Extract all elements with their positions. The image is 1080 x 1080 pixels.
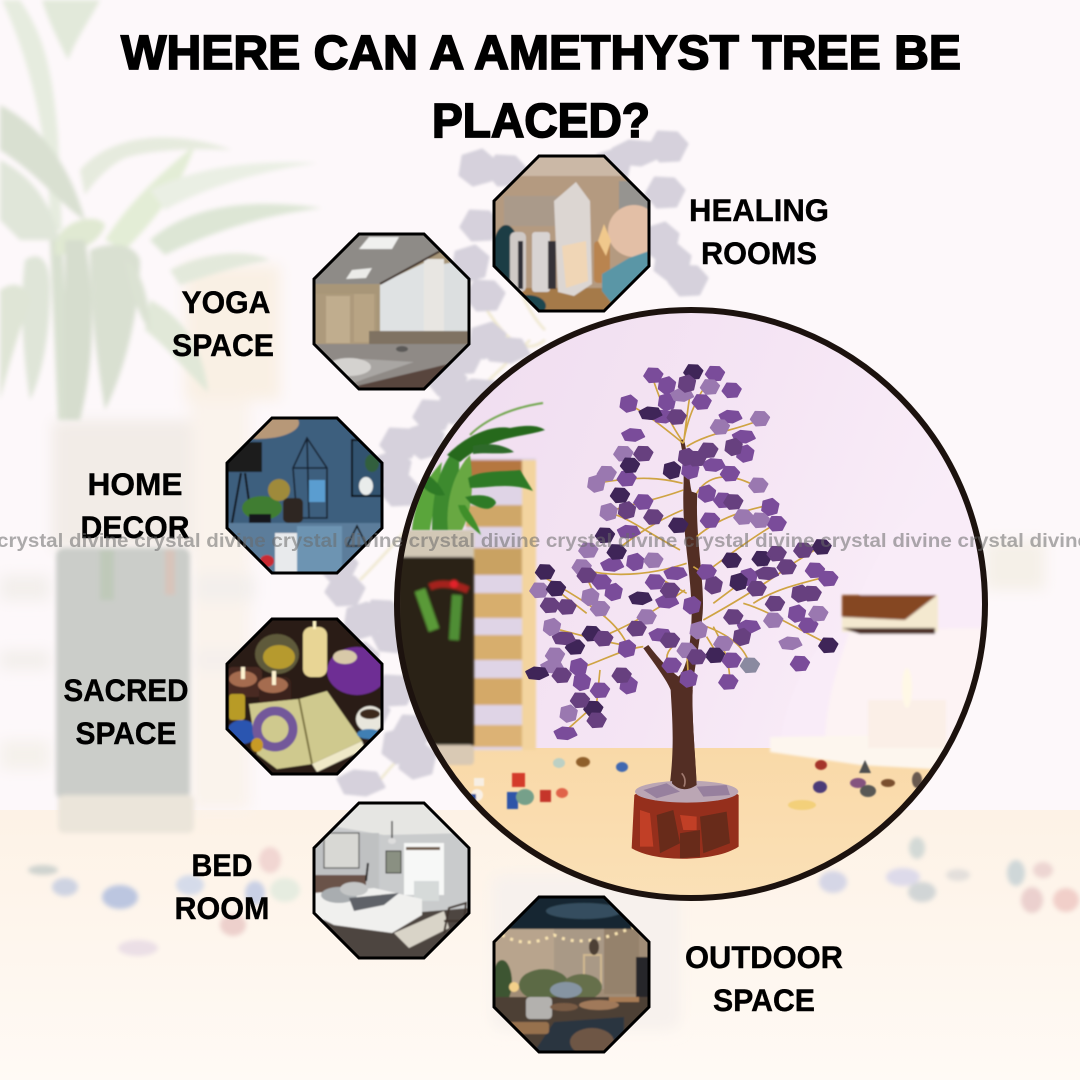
label: outdoor space: SPACE (713, 982, 815, 1018)
main circle photo with amethyst tree (390, 300, 990, 913)
label: outdoor space: OUTDOOR (685, 939, 843, 975)
label: healing rooms: HEALING (689, 192, 829, 228)
photo backdrop: wall and table (410, 313, 956, 895)
label: home decor (80, 466, 190, 545)
wooden shelf (466, 458, 536, 750)
octagon: healing rooms photo (491, 156, 660, 317)
title: PLACED? (432, 95, 650, 148)
label: bed room (174, 847, 270, 926)
label: sacred space: SPACE (76, 715, 176, 751)
label: yoga space (172, 284, 274, 363)
octagon: outdoor space photo (492, 897, 649, 1056)
title (121, 27, 961, 148)
label: sacred space (64, 672, 188, 751)
label: bed room: ROOM (174, 890, 270, 926)
label: yoga space: SPACE (172, 327, 274, 363)
circle outline (397, 310, 985, 898)
label: bed room: BED (192, 847, 252, 883)
amethyst chips (554, 367, 838, 739)
octagon: home decor photo (215, 407, 382, 573)
background bamboo plant (0, 0, 322, 420)
ghost amethyst tree behind the circle (319, 132, 707, 795)
label: outdoor space (685, 939, 843, 1018)
label: healing rooms: ROOMS (701, 235, 817, 271)
background vase (56, 548, 194, 833)
watermark: crystal divine crystal divine crystal divine crystal divine crystal divine crystal divine crystal divine crystal divine (0, 530, 1080, 552)
octagon: sacred space photo (227, 619, 387, 774)
gold wire branches (543, 373, 827, 730)
label: yoga space: YOGA (182, 284, 270, 320)
background scattered stones (28, 837, 1079, 956)
label: sacred space: SACRED (64, 672, 188, 708)
tree trunk and branches (643, 439, 703, 783)
title: WHERE CAN A AMETHYST TREE BE (121, 27, 961, 80)
faint boxes on right and behind outdoor octagon (492, 540, 1045, 1030)
octagon: yoga space photo (314, 234, 469, 389)
white cloth and book at right (768, 593, 947, 770)
green plant (412, 403, 545, 535)
dark glass vase (398, 530, 474, 765)
octagon: bedroom photo (314, 803, 469, 958)
label: home decor: DECOR (80, 509, 190, 545)
amethyst tree (526, 365, 838, 859)
coloured stones on table (464, 757, 922, 810)
label: home decor: HOME (88, 466, 182, 502)
label: healing rooms (689, 192, 829, 271)
rust red tree base (632, 690, 739, 859)
